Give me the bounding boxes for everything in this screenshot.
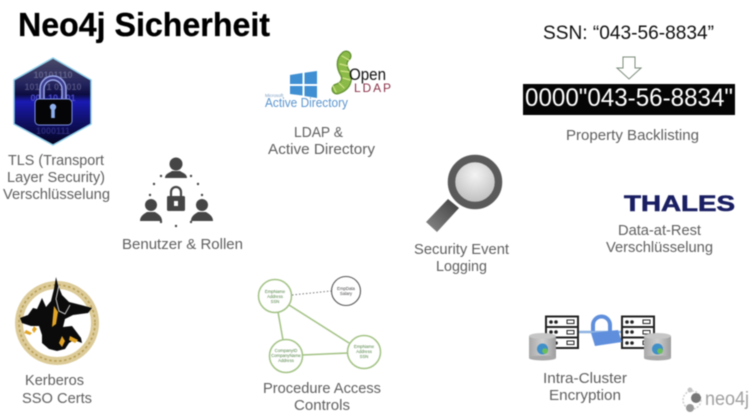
text: intra-cluster label: [543, 371, 627, 404]
panel: Benutzer und Rollen: [122, 158, 243, 253]
chart: node graph: SSN: [271, 299, 279, 304]
text: Kerberos label: SSO Certs: [22, 391, 92, 407]
text: LDAP label: LDAP &: [294, 125, 343, 141]
chart: node graph: Address: [267, 294, 283, 299]
icon: hexagon padlock: [14, 58, 91, 145]
icon: right server rack: [622, 316, 654, 348]
icon: hexagon padlock: 110 011: [37, 115, 69, 125]
chart: node graph: EmpName: [354, 344, 375, 349]
text: procedure label: [263, 381, 381, 414]
panel: Security Event Logging: [414, 158, 509, 275]
icon: blue padlock: [591, 316, 622, 346]
panel: Procedure Access Controls: [258, 276, 381, 414]
icon: left server rack: [546, 316, 578, 348]
text: logging label: [414, 242, 509, 275]
text: Active Directory logo: Microsoft: [265, 93, 284, 98]
connector line: [578, 331, 622, 333]
icon: right database: [644, 333, 671, 360]
chart: node graph: Address: [356, 349, 372, 354]
text: TLS label: Layer Security): [7, 170, 105, 186]
text: SSN value: SSN: “043-56-8834”: [543, 22, 714, 44]
text: Active Directory logo: Active Directory: [265, 95, 348, 110]
text: procedure label: Procedure Access: [263, 381, 381, 397]
text: TLS label: Verschlüsselung: [3, 187, 110, 203]
chart: node graph: Salary: [340, 291, 353, 296]
panel: TLS: [3, 58, 110, 203]
panel: Property Blacklisting: [523, 22, 735, 144]
black output box: 0000"043-56-8834": [525, 84, 733, 112]
text: LDAP label: [268, 125, 376, 158]
text: TLS label: [3, 153, 110, 203]
icon: hexagon padlock: 1000111: [36, 126, 70, 136]
panel: Kerberos: [19, 277, 95, 407]
icon: hexagon padlock: 10101110: [33, 70, 73, 80]
text: TLS label: TLS (Transport: [8, 153, 104, 169]
chart: node graph: CompanyID: [275, 348, 297, 353]
icon: left database: [529, 333, 556, 360]
chart: node graph: Address: [278, 358, 294, 363]
text: data-at-rest label: Data-at-Rest: [618, 223, 701, 239]
text: OpenLDAP logo: LDAP: [354, 81, 391, 95]
text: procedure label: Controls: [294, 398, 350, 414]
chart: node graph: EmpData: [337, 286, 356, 291]
text: data-at-rest label: [606, 223, 713, 256]
text: Kerberos label: Kerberos: [25, 373, 84, 389]
icon: magnifying glass: [426, 158, 498, 232]
title: Neo4j Sicherheit: [18, 6, 270, 43]
icon: Windows logo: [290, 71, 317, 98]
text: data-at-rest label: Verschlüsselung: [606, 240, 713, 256]
icon: hexagon padlock: 001 10 001: [30, 93, 76, 103]
chart: node graph: CompanyName: [271, 353, 302, 358]
icon: Cerberus in a gold ring: [19, 277, 95, 361]
text: intra-cluster label: Encryption: [549, 388, 621, 404]
logo: neo4j: [683, 388, 749, 412]
arrow: down outline: [617, 57, 641, 79]
chart: node graph: [258, 276, 380, 372]
text: users label: Benutzer & Rollen: [122, 237, 243, 253]
text: OpenLDAP logo: [349, 65, 391, 95]
chart: node graph: SSN: [360, 354, 368, 359]
text: Property Backlisting label: Property Backlisting: [566, 128, 699, 144]
text: THALES logo: THALES: [624, 191, 735, 216]
panel: LDAP: [265, 56, 391, 158]
text: Kerberos label: [22, 373, 92, 407]
icon: users around a lock: [140, 158, 213, 227]
text: LDAP label: Active Directory: [268, 142, 376, 158]
text: OpenLDAP logo: Open: [349, 65, 386, 84]
icon: hexagon padlock: 010 110: [37, 104, 69, 114]
panel: Intra-Cluster Encryption: [529, 316, 671, 404]
text: logging label: Logging: [436, 259, 487, 275]
panel: Data-at-Rest: [606, 191, 735, 256]
text: intra-cluster label: Intra-Cluster: [543, 371, 627, 387]
chart: node graph: EmpName: [265, 289, 286, 294]
icon: hexagon padlock: 1011 1 01 010: [24, 82, 82, 92]
icon: OpenLDAP worm: [333, 56, 350, 92]
text: logging label: Security Event: [414, 242, 509, 258]
